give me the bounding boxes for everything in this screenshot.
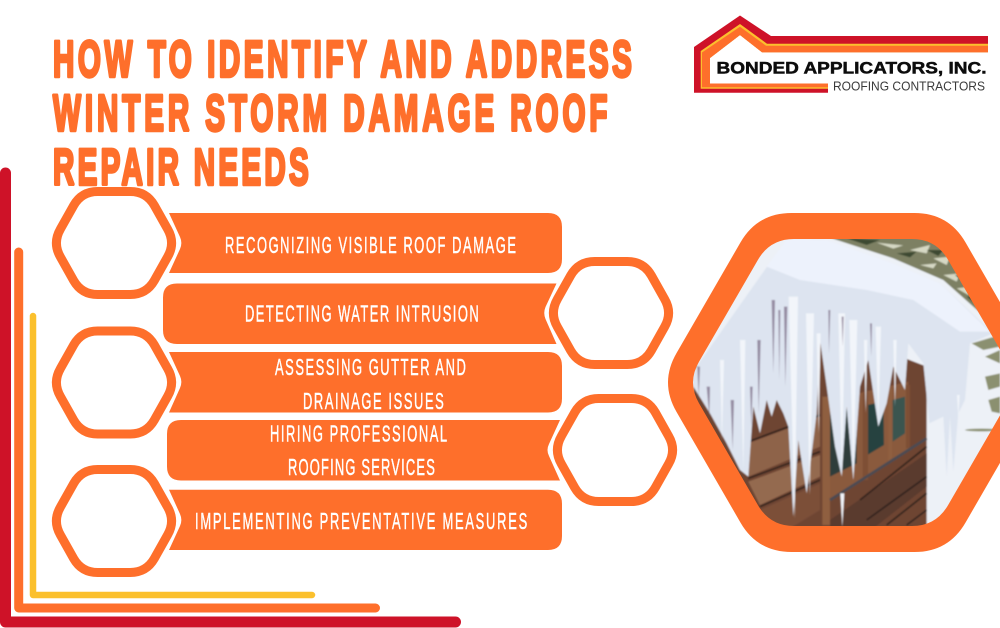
photo panel: icicles on cabin roof in hexagon frame <box>668 213 1000 552</box>
title: REPAIR NEEDS <box>53 138 309 196</box>
banner 3 label: ASSESSING GUTTER AND <box>275 355 466 381</box>
hexagon icon frame 1 <box>56 192 172 294</box>
banner 4 <box>167 420 560 480</box>
hexagon icon frame 3 <box>56 331 172 434</box>
banner 5 <box>169 490 562 550</box>
banner 2 label: DETECTING WATER INTRUSION <box>245 302 479 328</box>
corner lines: red, orange, yellow <box>6 173 456 622</box>
hexagon photo frame <box>668 213 1000 552</box>
banner 3 <box>169 352 562 412</box>
logo: Bonded Applicators, Inc.: BONDED APPLICATORS, INC. <box>716 59 986 77</box>
banner 1 <box>169 213 562 273</box>
hexagon icon frame 2 <box>553 262 669 364</box>
hexagon icon frame 5 <box>56 470 172 572</box>
step 5: implementing preventative measures <box>56 470 562 572</box>
banner 2 <box>163 284 556 344</box>
title: HOW TO IDENTIFY AND ADDRESS <box>53 30 632 88</box>
logo: Bonded Applicators, Inc. <box>694 16 988 94</box>
banner 4 label <box>270 422 447 481</box>
banner 4 label: HIRING PROFESSIONAL <box>270 422 447 448</box>
logo: Bonded Applicators, Inc.: ROOFING CONTRACTORS <box>833 79 985 94</box>
step 2: detecting water intrusion <box>163 262 669 364</box>
step 1: recognizing visible roof damage <box>56 192 562 294</box>
banner 5 label: IMPLEMENTING PREVENTATIVE MEASURES <box>195 509 527 535</box>
banner 3 label: DRAINAGE ISSUES <box>303 389 444 415</box>
title: WINTER STORM DAMAGE ROOF <box>53 84 607 142</box>
step 4: hiring professional roofing services <box>167 398 673 502</box>
title <box>53 30 632 196</box>
photo illustration <box>693 239 1000 526</box>
step 3: assessing gutter and drainage issues <box>56 331 562 434</box>
banner 4 label: ROOFING SERVICES <box>288 455 435 481</box>
hexagon icon frame 4 <box>557 398 673 502</box>
banner 1 label: RECOGNIZING VISIBLE ROOF DAMAGE <box>225 233 516 259</box>
banner 3 label <box>275 355 466 415</box>
